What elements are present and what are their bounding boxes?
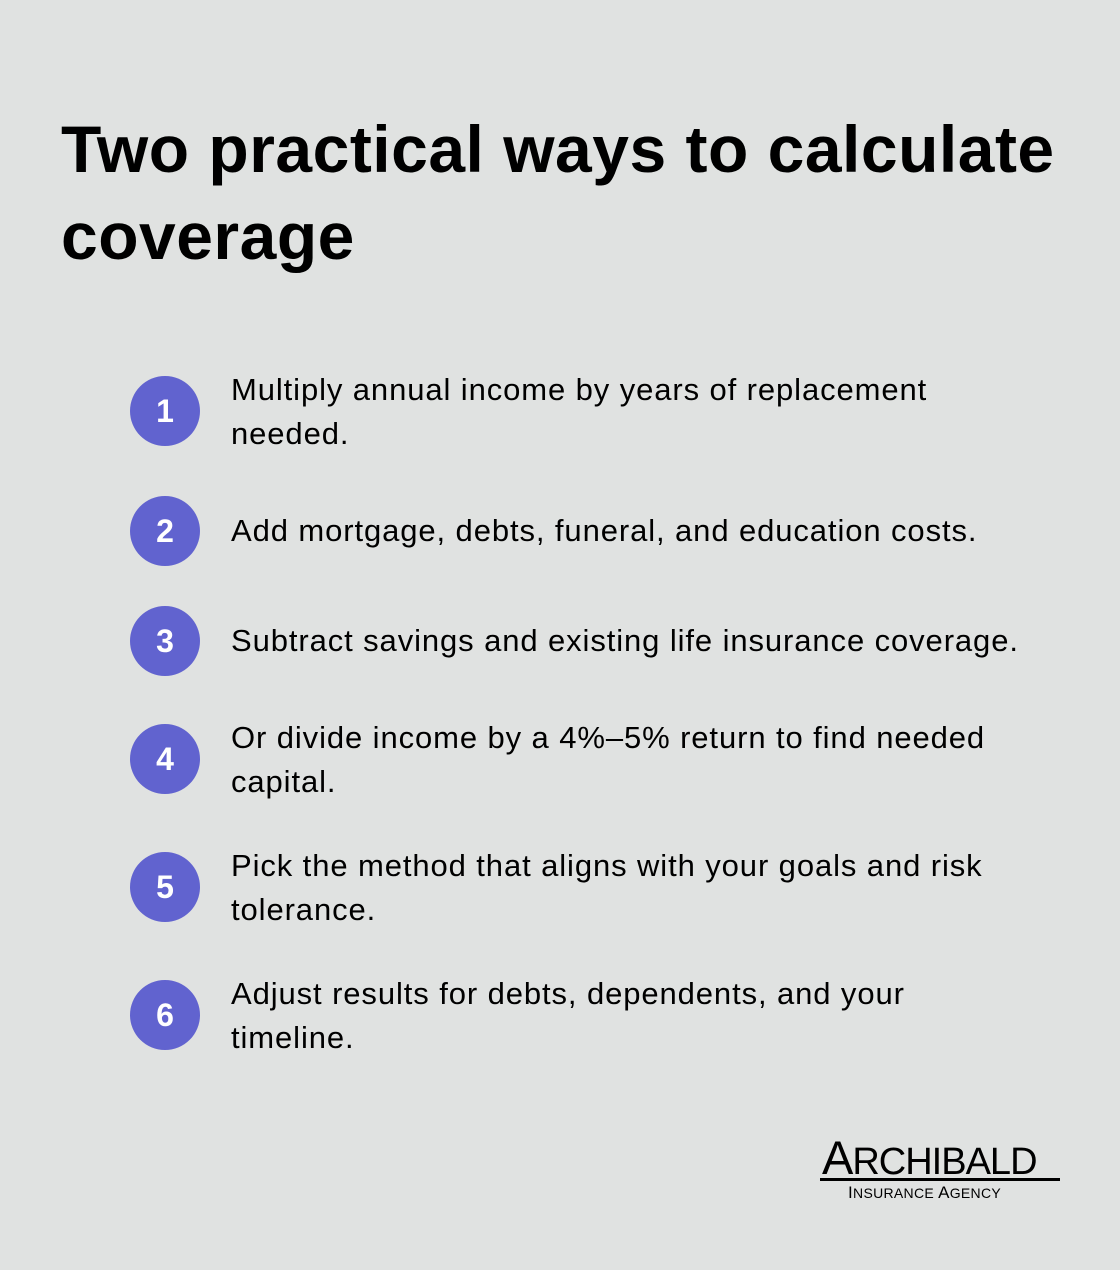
step 4: 4: [156, 741, 174, 777]
step 4: capital.: [231, 764, 336, 799]
step 6: [130, 976, 905, 1055]
step 6: 6: [156, 997, 174, 1033]
step 6: Adjust results for debts, dependents, and your: [231, 976, 905, 1011]
title: coverage: [61, 199, 355, 273]
step 5: 5: [156, 869, 174, 905]
logo: INSURANCE AGENCY: [848, 1183, 1001, 1202]
step 4: [130, 720, 985, 799]
step 6: timeline.: [231, 1020, 355, 1055]
step 5: Pick the method that aligns with your goals and risk: [231, 848, 983, 883]
step 2: Add mortgage, debts, funeral, and education costs.: [231, 513, 977, 548]
step 3: [130, 606, 1019, 676]
step 2: 2: [156, 513, 174, 549]
step 5: tolerance.: [231, 892, 376, 927]
step 1: needed.: [231, 416, 349, 451]
step 3: 3: [156, 623, 174, 659]
step 3: Subtract savings and existing life insurance coverage.: [231, 623, 1019, 658]
logo: ARCHIBALD: [822, 1131, 1037, 1184]
step 1: [130, 372, 927, 451]
step 1: Multiply annual income by years of replacement: [231, 372, 927, 407]
step 4: Or divide income by a 4%–5% return to find needed: [231, 720, 985, 755]
step 1: 1: [156, 393, 174, 429]
step 2: [130, 496, 977, 566]
title: Two practical ways to calculate: [61, 112, 1055, 186]
step 5: [130, 848, 983, 927]
title: [61, 112, 1055, 273]
logo: [820, 1131, 1060, 1202]
